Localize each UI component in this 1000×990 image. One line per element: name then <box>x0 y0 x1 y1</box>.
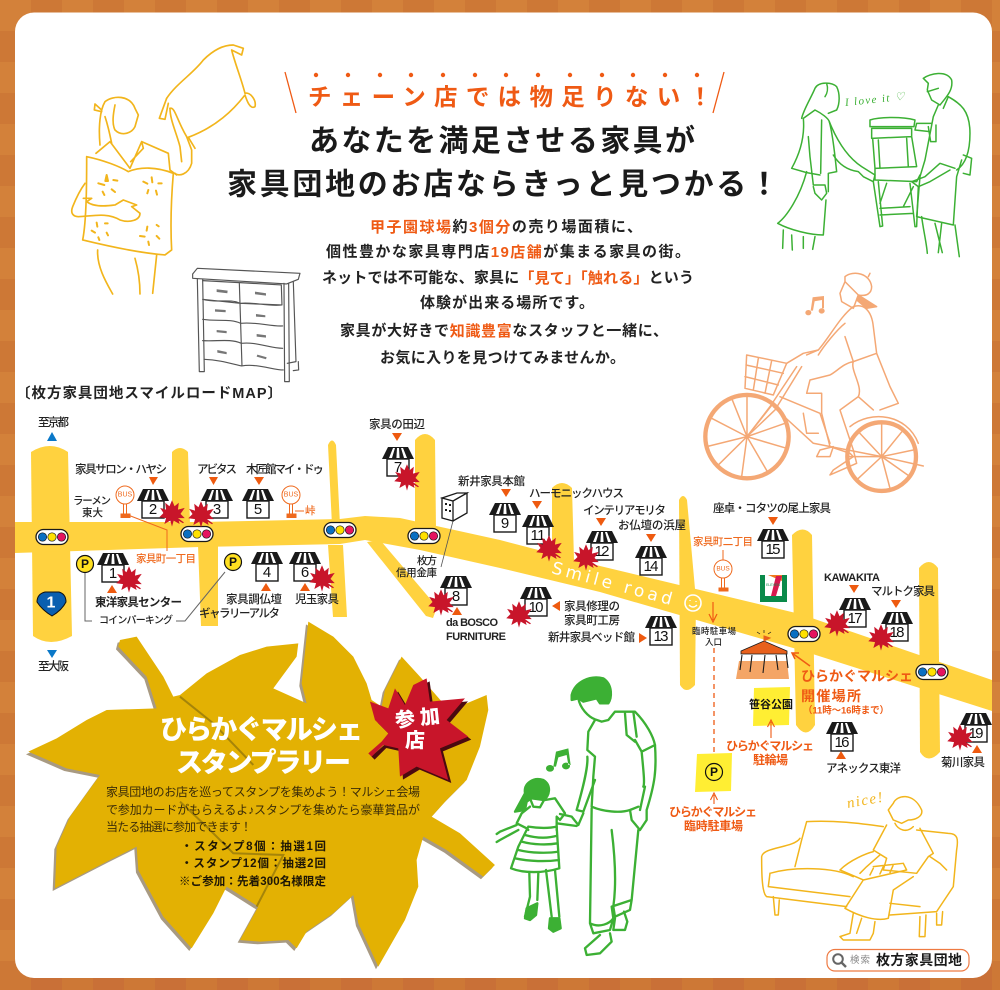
handwritten note: nice: nice! <box>846 790 884 812</box>
handwritten note: I love it: I love it ♡ <box>843 91 906 109</box>
bus stop: left: BUS <box>118 492 133 498</box>
shop 16: 16 <box>834 734 850 751</box>
shop 9 <box>489 503 521 532</box>
bus stop: Kagucho 2-chome: BUS <box>716 566 730 572</box>
label: marche venue: 開催場所 <box>801 688 861 704</box>
shop 10 <box>520 587 552 616</box>
shop name labels: 児玉家具 <box>295 592 340 606</box>
stamp rally body text: で参加カードがもらえるよ♪スタンプを集めたら豪華賞品が <box>106 802 420 817</box>
shop 14 <box>635 546 667 575</box>
shop 6: 6 <box>301 564 309 581</box>
temporary parking entrance: 臨時駐車場 <box>692 626 736 636</box>
participating shop maple badge: 参加 <box>394 705 441 732</box>
label: marche venue: ひらかぐマルシェ <box>801 668 913 684</box>
road label: Smile road: Smile road <box>549 558 674 610</box>
search box: 検索 <box>850 954 870 966</box>
intro paragraph: 体験が出来る場所です。 <box>420 294 594 312</box>
shop 18 <box>881 612 913 641</box>
shop name labels: 家具修理の <box>564 599 620 613</box>
coin parking markers and leader lines: P <box>229 555 237 569</box>
shop name labels <box>75 417 986 775</box>
header: left slash <box>285 72 296 113</box>
map: traffic lights <box>36 522 948 680</box>
shop 7 <box>382 447 414 476</box>
bus stop label: Kagucho 1-chome: 家具町一丁目 <box>136 552 196 565</box>
header: orange dots row <box>314 73 699 77</box>
shop 1 <box>97 553 129 582</box>
header: right slash <box>713 72 724 113</box>
shop 11 <box>522 515 554 544</box>
map: yellow roads <box>15 434 992 758</box>
shop name labels: ギャラリーアルタ <box>199 607 280 620</box>
participating shop maple badge: 店 <box>405 729 425 752</box>
bus stop: left <box>116 486 167 551</box>
intro paragraph: 個性豊かな家具専門店19店舗が集まる家具の街。 <box>326 242 690 260</box>
intro paragraph: ネットでは不可能な、家具に「見て」「触れる」という <box>322 268 694 286</box>
search box: 枚方家具団地 <box>876 952 962 968</box>
illustration: woman on bicycle <box>705 273 923 491</box>
icon: marche tent <box>736 630 789 679</box>
shop 1: 1 <box>109 565 117 582</box>
intro paragraph: 家具が大好きで知識豊富なスタッフと一緒に、 <box>340 322 668 340</box>
pointer triangles to shops <box>107 433 982 759</box>
participating-shop maple leaves <box>116 464 973 751</box>
title line 2: 家具団地のお店ならきっと見つかる！ <box>227 168 779 202</box>
icon: 7-Eleven store: ELEVEN <box>766 583 780 587</box>
shop 13: 13 <box>654 628 668 645</box>
stamp rally body text <box>106 784 420 888</box>
label: touge: 峠 <box>305 504 316 517</box>
shop name labels: 家具サロン・ハヤシ <box>75 462 167 476</box>
coin parking markers and leader lines: P <box>81 557 89 571</box>
icon: 7-Eleven store <box>760 575 787 602</box>
shop 2: 2 <box>149 501 157 518</box>
route 1 shield: 1 <box>47 594 56 612</box>
shop 8 <box>440 576 472 605</box>
temporary parking lot: P <box>710 765 718 779</box>
stamp rally body text: ※ご参加：先着300名様限定 <box>179 874 326 888</box>
shop name labels: インテリアモリタ <box>583 504 666 517</box>
bus stop: Kagucho 2-chome <box>714 550 732 591</box>
shop 15 <box>757 529 789 558</box>
illustration: woman on sofa <box>762 797 957 940</box>
landmark labels: 信用金庫 <box>396 566 438 579</box>
bus stop: right: BUS <box>284 492 299 498</box>
Sasaya park bicycle parking <box>726 687 814 767</box>
Sasaya park bicycle parking: 駐輪場 <box>753 752 788 767</box>
shop name labels: お仏壇の浜屋 <box>618 518 686 532</box>
shop 19 <box>960 713 992 742</box>
title line 1: あなたを満足させる家具が <box>309 124 695 158</box>
shop 19: 19 <box>968 725 984 742</box>
intro paragraph: 甲子園球場約3個分の売り場面積に、 <box>370 218 642 236</box>
shop 4 <box>251 552 283 581</box>
arrow to marche venue <box>792 653 810 666</box>
header: tagline: チェーン店では物足りない！ <box>308 84 712 110</box>
direction: to Osaka <box>38 650 70 673</box>
Sasaya park bicycle parking: 笹谷公園 <box>749 697 793 711</box>
shop 14: 14 <box>644 558 658 575</box>
stamp rally body text: 当たる抽選に参加できます！ <box>106 820 252 834</box>
shop name labels: 菊川家具 <box>941 755 986 769</box>
stamp rally title <box>160 715 363 778</box>
shop 13 <box>645 616 677 645</box>
shop 3: 3 <box>213 501 221 518</box>
shop 16 <box>826 722 858 751</box>
Sasaya park bicycle parking: ひらかぐマルシェ <box>726 739 814 753</box>
shop name labels: da BOSCO <box>446 617 498 629</box>
direction: to Osaka: 至大阪 <box>38 659 70 673</box>
direction: to Kyoto <box>38 415 70 441</box>
shop name labels: FURNITURE <box>446 631 506 643</box>
coin parking markers and leader lines <box>76 554 242 621</box>
shop 12 <box>586 531 618 560</box>
shop 2 <box>137 489 169 518</box>
stamp rally body text: 家具団地のお店を巡ってスタンプを集めよう！マルシェ会場 <box>106 784 420 799</box>
landmark labels: ラーメン <box>73 495 111 507</box>
intro paragraph <box>322 218 694 366</box>
shop name labels: 東洋家具センター <box>95 595 182 609</box>
shop name labels: マルトク家具 <box>871 584 936 598</box>
participating shop maple badge <box>368 678 471 783</box>
shop name labels: 座卓・コタツの尾上家具 <box>713 501 832 515</box>
illustration: woman with pillows <box>72 45 255 294</box>
label: marche venue: （11時～16時まで） <box>803 704 889 716</box>
shop 7: 7 <box>394 459 402 476</box>
shop 12: 12 <box>594 543 610 560</box>
shop 4: 4 <box>263 564 271 581</box>
stamp rally title: スタンプラリー <box>176 748 351 778</box>
shop name labels: KAWAKITA <box>824 572 880 584</box>
shop 18: 18 <box>890 624 904 641</box>
shop name labels: ハーモニックハウス <box>529 487 624 500</box>
shop 10: 10 <box>528 599 544 616</box>
shop name labels: 家具の田辺 <box>369 417 426 431</box>
shop 5 <box>242 489 274 518</box>
icon: Hirakata Shinkin Bank building <box>441 493 467 567</box>
illustration: chest of drawers <box>193 268 300 382</box>
landmark labels: 東大 <box>82 506 104 519</box>
shop 17: 17 <box>848 610 862 627</box>
illustration: father and daughter <box>497 677 656 955</box>
shop name labels: 木匠館マイ・ドゥ <box>246 462 324 476</box>
temporary parking entrance: 入口 <box>705 637 722 647</box>
stamp rally leaf shadow <box>26 622 495 969</box>
stamp rally body text: ・スタンプ12個：抽選2回 <box>181 856 326 870</box>
dashed route to temporary parking <box>713 648 715 752</box>
route 1 shield <box>37 592 66 616</box>
temporary parking lot: ひらかぐマルシェ <box>669 805 757 819</box>
shop name labels: アビタス <box>197 463 237 476</box>
shop 8: 8 <box>452 588 460 605</box>
landmark labels <box>73 495 438 626</box>
temporary parking lot: 臨時駐車場 <box>684 818 743 833</box>
shop 15: 15 <box>766 541 780 558</box>
temporary parking entrance <box>692 602 736 647</box>
shop name labels: 新井家具ベッド館 <box>548 630 635 644</box>
shop name labels: 家具町工房 <box>564 613 620 627</box>
shop 3 <box>201 489 233 518</box>
shop 5: 5 <box>254 501 262 518</box>
shop 11: 11 <box>530 527 546 544</box>
label: marche venue <box>801 668 913 716</box>
illustration: couple with chair <box>778 74 972 257</box>
temporary parking lot <box>669 753 757 833</box>
shop name labels: 家具調仏壇 <box>226 592 282 606</box>
map heading: 〔枚方家具団地スマイルロードMAP〕 <box>16 384 282 402</box>
intro paragraph: お気に入りを見つけてみませんか。 <box>380 348 625 366</box>
stamp rally title: ひらかぐマルシェ <box>160 715 363 745</box>
shop name labels: 新井家具本館 <box>458 474 525 488</box>
landmark labels: 枚方 <box>417 554 437 567</box>
direction: to Kyoto: 至京都 <box>38 415 70 429</box>
shop 6 <box>289 552 321 581</box>
label: Kagucho 2-chome: 家具町二丁目 <box>693 535 753 548</box>
search box <box>827 950 969 971</box>
landmark labels: コインパーキング <box>99 614 173 626</box>
bus stop: right <box>282 486 304 518</box>
shop 17 <box>839 598 871 627</box>
stamp rally body text: ・スタンプ8個：抽選1回 <box>181 839 326 853</box>
shop 9: 9 <box>501 515 509 532</box>
shop name labels: アネックス東洋 <box>826 761 902 775</box>
